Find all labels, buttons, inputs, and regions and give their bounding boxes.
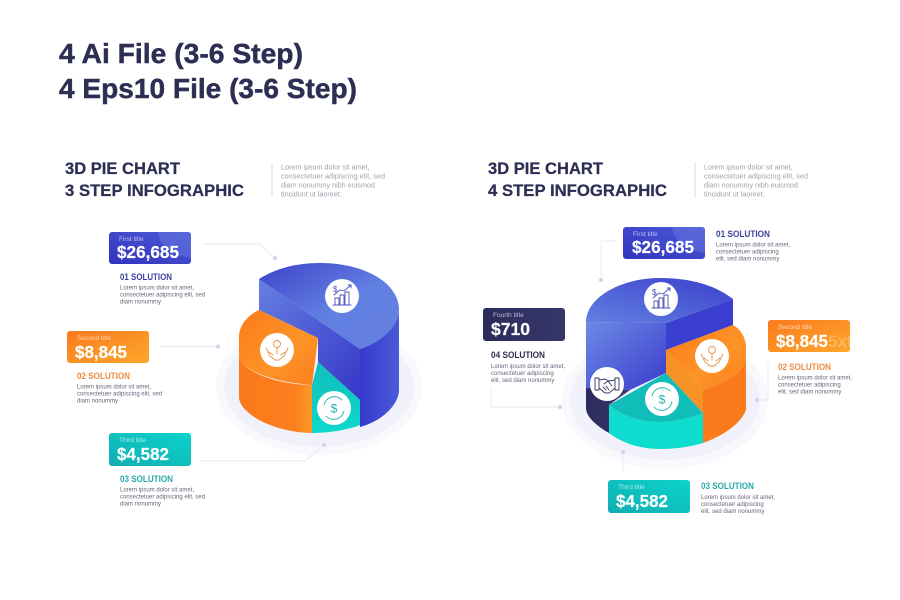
- icon: growth chart: $: [652, 288, 657, 297]
- text: 01 solution: Lorem ipsum dolor sit amet,: [716, 242, 790, 248]
- callout: third title: [608, 480, 690, 513]
- icon: hands and plant: [260, 333, 294, 367]
- 3D pie chart: 3 step: [239, 263, 399, 433]
- text: 03 solution: elit, sed diam nonummy: [701, 509, 764, 515]
- callout: third title: $4,582: [117, 444, 169, 464]
- pie shadow: 4 step: [562, 331, 768, 469]
- text: 02 solution: elit, sed diam nonummy: [778, 390, 841, 396]
- text: 03 solution: Lorem ipsum dolor sit amet,: [120, 488, 194, 494]
- intro text: 3 step: tincidunt ut laoreet.: [281, 190, 342, 198]
- text: 01 solution: diam nonummy: [120, 300, 161, 306]
- connector: fourth: [491, 388, 562, 409]
- text: 04 solution: [491, 350, 565, 384]
- text: 02 solution: consectetuer adipiscing elit, sed: [77, 392, 162, 398]
- connector: second: [755, 362, 768, 402]
- callout: fourth title: [483, 308, 565, 341]
- heading: 4 step: 4 STEP INFOGRAPHIC: [488, 181, 667, 200]
- callout: fourth title: $710: [491, 319, 530, 339]
- connector: second: [160, 344, 220, 348]
- text: 03 solution: 03 SOLUTION: [120, 474, 173, 485]
- heading: 3 step: 3 STEP INFOGRAPHIC: [65, 181, 244, 200]
- callout: third title: Third title: [618, 484, 645, 491]
- pie shadow: 3 step: [216, 319, 422, 455]
- text: 01 solution: 01 SOLUTION: [120, 272, 172, 283]
- text: 03 solution: diam nonummy: [120, 502, 161, 508]
- slice: orange: [239, 310, 318, 433]
- text: 03 solution: consectetuer adipiscing: [701, 502, 764, 508]
- icon: dollar cycle: $: [659, 392, 666, 406]
- text: 02 solution: diam nonummy: [77, 398, 118, 404]
- icon: growth chart: [644, 282, 678, 316]
- intro text: 4 step: diam nonummy nibh euismod: [704, 180, 798, 190]
- callout: second title: [67, 331, 149, 363]
- callout: second title: $8,845: [75, 342, 127, 362]
- heading: 3 step: 3D PIE CHART: [65, 159, 181, 178]
- panel: 3 step infographic: [65, 159, 422, 508]
- text: 04 solution: elit, sed diam nonummy: [491, 378, 554, 384]
- callout: second title: 5xt: [828, 332, 853, 351]
- text: 02 solution: 02 SOLUTION: [778, 362, 831, 373]
- intro text: 4 step: tincidunt ut laoreet.: [704, 190, 765, 198]
- heading: 3 step: [65, 159, 244, 200]
- icon: dollar cycle: [317, 391, 351, 425]
- slice: orange: [666, 325, 746, 443]
- panel: 4 step infographic: [483, 159, 853, 515]
- icon: dollar cycle: $: [331, 402, 338, 416]
- slice: teal: [312, 362, 360, 433]
- callout: first title: First title: [633, 231, 658, 238]
- text: 03 solution: [120, 474, 205, 508]
- text: 03 solution: 03 SOLUTION: [701, 481, 754, 492]
- intro text: 4 step: [704, 162, 808, 198]
- text: 04 solution: Lorem ipsum dolor sit amet,: [491, 364, 565, 370]
- intro text: 3 step: consectetuer adipiscing elit, sed: [281, 172, 385, 180]
- heading: 4 step: [488, 159, 667, 200]
- text: 02 solution: [77, 371, 162, 404]
- callout: third title: Third title: [119, 437, 146, 444]
- callout: first title: $26,685: [632, 237, 694, 257]
- text: 02 solution: consectetuer adipiscing: [778, 382, 841, 388]
- main title: [59, 38, 357, 104]
- callout: first title: [623, 227, 705, 259]
- text: 04 solution: consectetuer adipiscing: [491, 371, 554, 377]
- slice: navy: [586, 388, 630, 433]
- text: 01 solution: [120, 272, 205, 306]
- icon: dollar cycle: [645, 382, 679, 416]
- intro text: 3 step: diam nonummy nibh euismod: [281, 180, 375, 190]
- callout: second title: [768, 320, 853, 352]
- slice: teal: [609, 373, 703, 449]
- callout: first title: [109, 232, 191, 264]
- main title: 4 Ai File (3-6 Step): [59, 38, 303, 69]
- icon: growth chart: $: [333, 285, 338, 294]
- text: 02 solution: Lorem ipsum dolor sit amet,: [77, 384, 151, 390]
- callout: second title: $8,845: [776, 331, 828, 351]
- 3D pie chart: 4 step: [586, 278, 746, 449]
- slice: blue: [259, 263, 399, 427]
- connector: third: [621, 450, 625, 472]
- callout: second title: Second title: [778, 324, 812, 331]
- intro text: 4 step: consectetuer adipiscing elit, sed: [704, 172, 808, 180]
- main title: 4 Eps10 File (3-6 Step): [59, 73, 357, 104]
- callout: fourth title: Fourth title: [493, 312, 524, 319]
- text: 03 solution: consectetuer adipiscing elit, sed: [120, 494, 205, 500]
- text: 01 solution: 01 SOLUTION: [716, 229, 770, 240]
- slice: blue: [586, 278, 733, 390]
- text: 01 solution: [716, 229, 790, 262]
- intro text: 3 step: [281, 162, 385, 198]
- intro text: 4 step: Lorem ipsum dolor sit amet,: [704, 162, 793, 172]
- connector: first: [599, 241, 616, 282]
- text: 03 solution: [701, 481, 775, 515]
- callout: second title: Second title: [77, 335, 111, 342]
- icon: hands and plant: [695, 339, 729, 373]
- text: 01 solution: consectetuer adipiscing: [716, 250, 779, 256]
- callout: first title: First title: [119, 236, 144, 243]
- text: 03 solution: Lorem ipsum dolor sit amet,: [701, 495, 775, 501]
- text: 01 solution: elit, sed diam nonummy: [716, 256, 779, 262]
- icon: handshake: [590, 367, 624, 401]
- text: 04 solution: 04 SOLUTION: [491, 350, 545, 361]
- connector: third: [200, 443, 326, 461]
- callout: third title: $4,582: [616, 491, 668, 511]
- heading: 4 step: 3D PIE CHART: [488, 159, 604, 178]
- text: 01 solution: Lorem ipsum dolor sit amet,: [120, 286, 194, 292]
- text: 02 solution: Lorem ipsum dolor sit amet,: [778, 376, 852, 382]
- callout: third title: [109, 433, 191, 466]
- intro text: 3 step: Lorem ipsum dolor sit amet,: [281, 162, 370, 172]
- text: 02 solution: [778, 362, 852, 396]
- connector: first: [203, 244, 277, 260]
- callout: first title: $26,685: [117, 242, 179, 262]
- icon: growth chart: [325, 279, 359, 313]
- text: 02 solution: 02 SOLUTION: [77, 371, 130, 382]
- text: 01 solution: consectetuer adipiscing elit, sed: [120, 292, 205, 298]
